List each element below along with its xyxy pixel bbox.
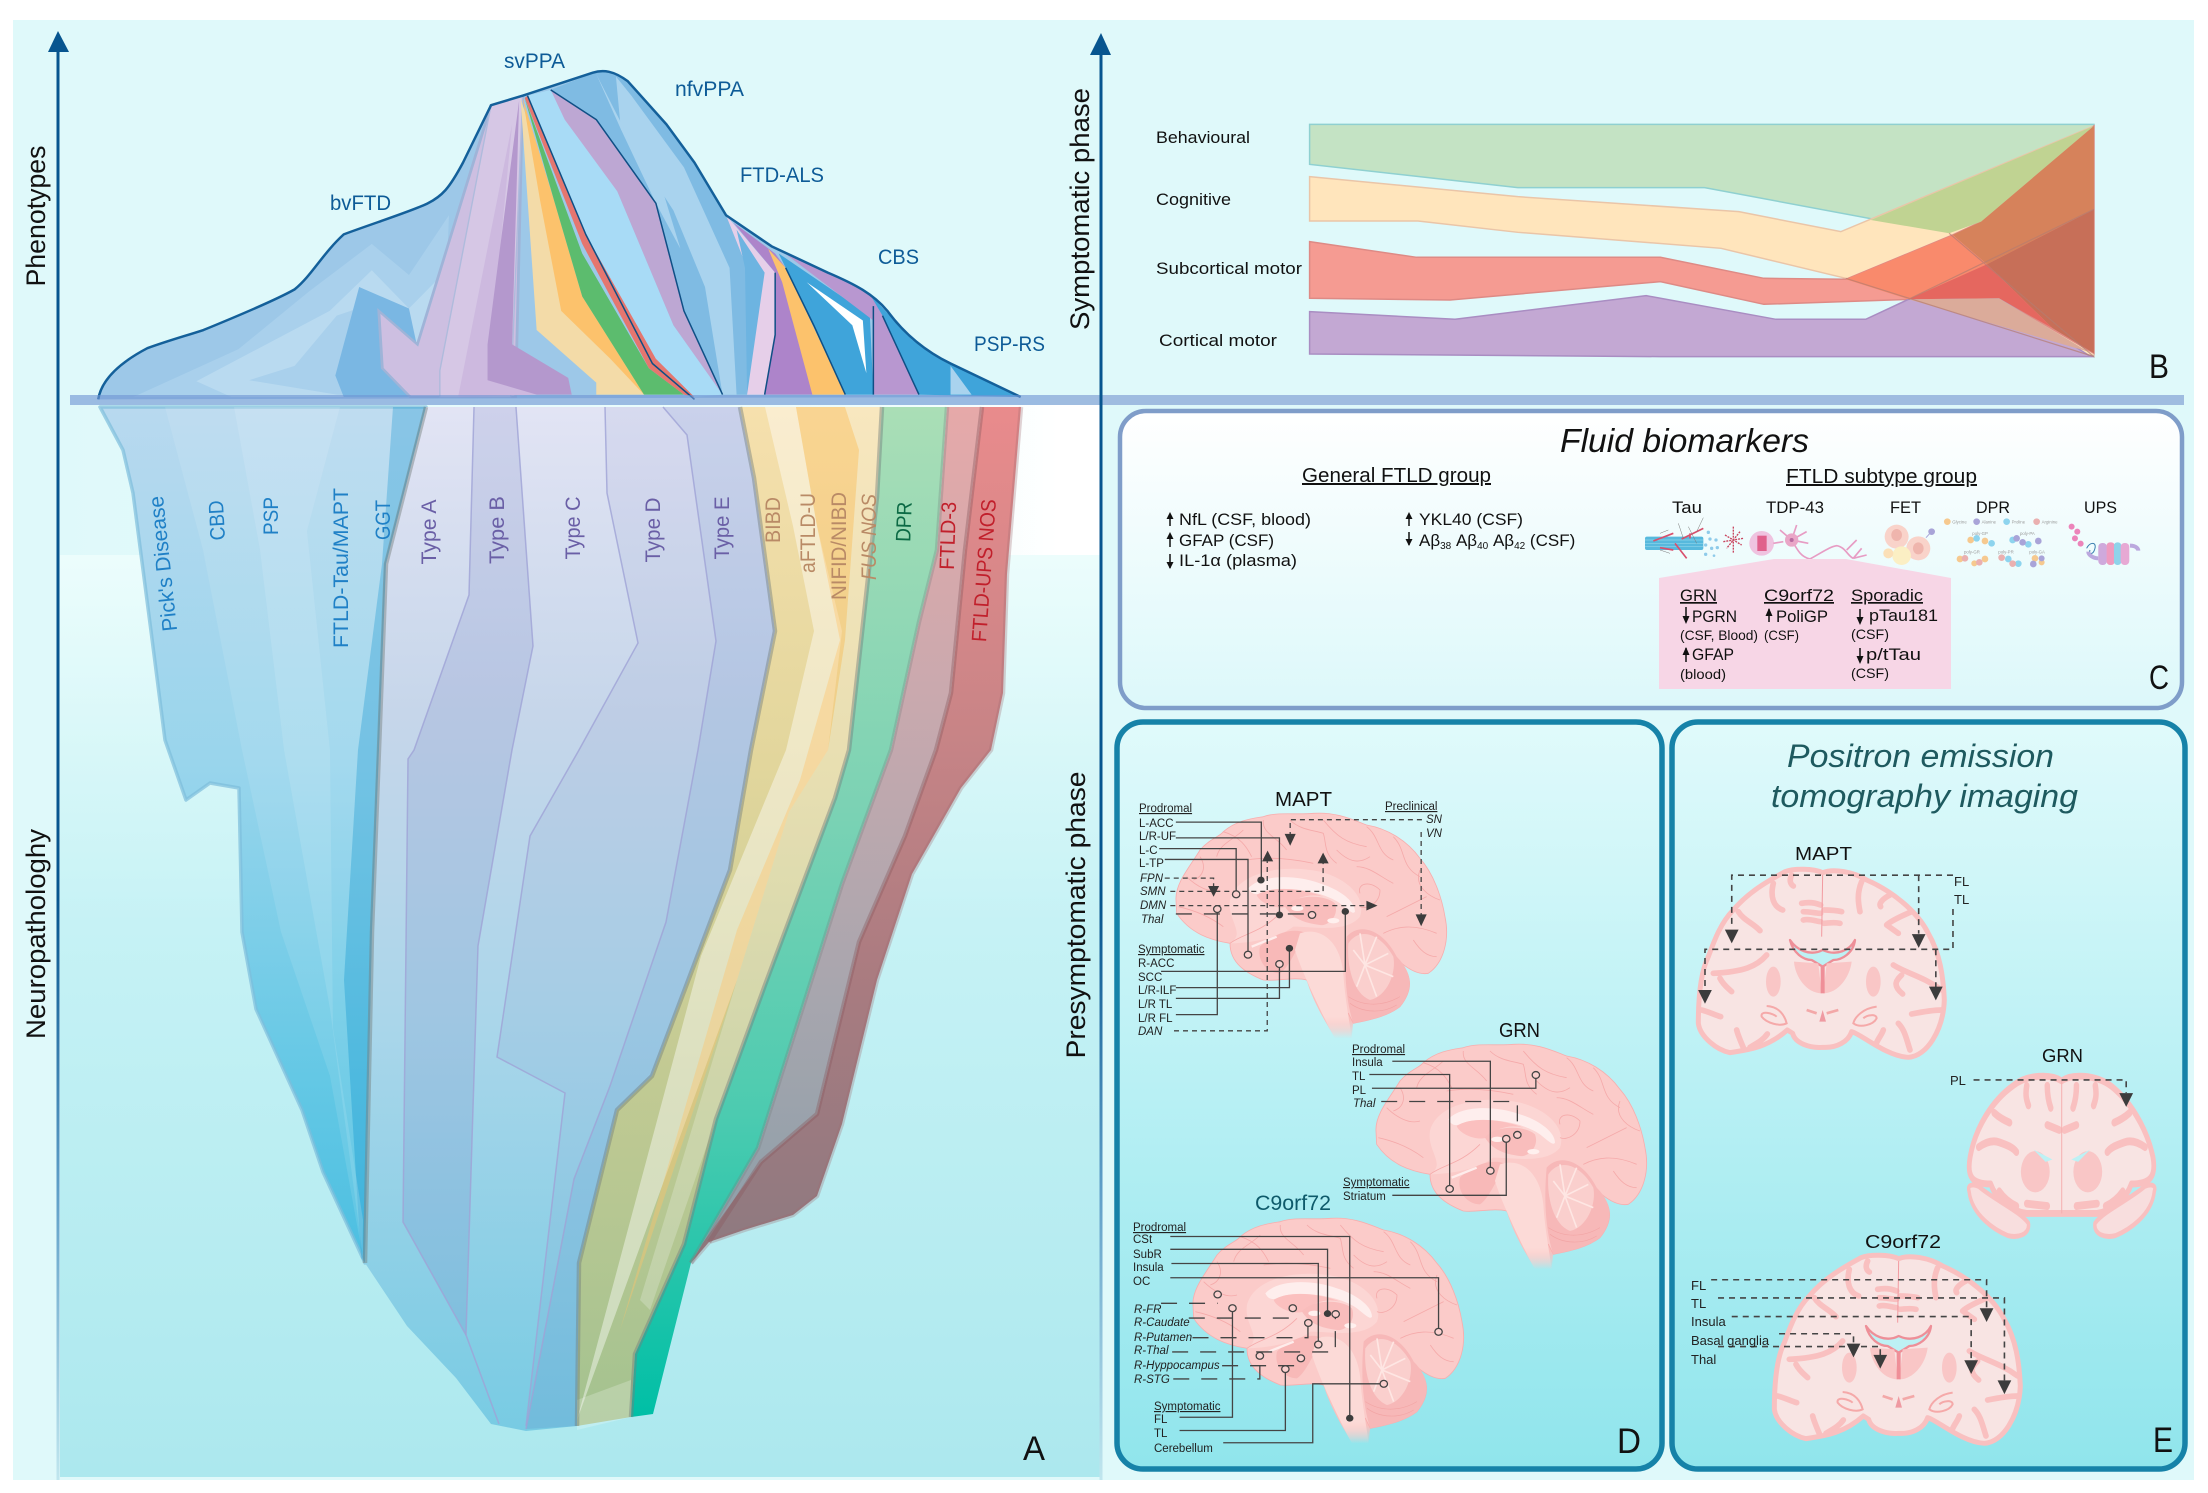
- MAPT region labels: L/R FL: [1138, 1013, 1173, 1025]
- panel letter A: A: [1023, 1430, 1045, 1468]
- neuropathology label: DPR: DPR: [892, 501, 917, 542]
- neuropathology label: FTLD-3: FTLD-3: [936, 501, 961, 570]
- subtype headers: FET: [1890, 498, 1921, 517]
- GRN region labels: Thal: [1353, 1098, 1376, 1110]
- panel letter C: C: [2149, 659, 2169, 697]
- heading: PET imaging title: tomography imaging: [1771, 778, 2078, 814]
- GRN leader lines: [1369, 1061, 1540, 1195]
- C9orf72 region labels: Cerebellum: [1154, 1443, 1213, 1455]
- general biomarker list, right column: Aβ: [1451, 531, 1477, 550]
- GRN region labels: PL: [1352, 1085, 1367, 1097]
- TDP-43 genetic subgroups callout: PoliGP: [1776, 607, 1828, 626]
- icon: DPR dipeptide repeats: poly-GA: [2029, 549, 2045, 554]
- neuropathology label: Type C: Type C: [562, 496, 585, 560]
- icon: MAPT coronal brain: [1698, 869, 1944, 1057]
- general biomarker list, right column: 38: [1440, 541, 1452, 552]
- neuropathology label: GGT: GGT: [372, 500, 395, 540]
- TDP-43 genetic subgroups callout: GFAP: [1692, 645, 1734, 664]
- panel letter D: D: [1617, 1422, 1641, 1461]
- heading: Fluid biomarkers: Fluid biomarkers: [1560, 422, 1809, 459]
- C9orf72 region labels: Prodromal: [1133, 1222, 1186, 1234]
- GRN region labels: Striatum: [1343, 1191, 1386, 1203]
- MAPT region labels: L-ACC: [1139, 818, 1174, 830]
- heading: GRN: GRN: [1499, 1020, 1540, 1042]
- phenotype label: svPPA: svPPA: [504, 50, 565, 73]
- heading: MAPT: MAPT: [1795, 844, 1852, 864]
- MAPT lobes labels: FL: [1954, 874, 1969, 889]
- C9orf72 region labels: Basal ganglia: [1691, 1333, 1770, 1348]
- icon: GRN coronal brain: [1969, 1076, 2155, 1236]
- C9orf72 region labels: FL: [1154, 1414, 1168, 1426]
- TDP-43 genetic subgroups callout: GRN: [1680, 586, 1717, 605]
- heading: MAPT: MAPT: [1275, 789, 1332, 811]
- MAPT region labels: L/R-UF: [1139, 831, 1176, 843]
- GRN region labels: Insula: [1352, 1057, 1383, 1069]
- TDP-43 genetic subgroups callout: [1659, 559, 1951, 689]
- MAPT region labels: Thal: [1141, 914, 1164, 926]
- TDP-43 genetic subgroups callout: p/tTau: [1866, 645, 1921, 664]
- icon: UPS proteasome: [2069, 524, 2138, 565]
- icon: DPR dipeptide repeats: poly-GP: [1972, 531, 1988, 536]
- label: Behavioural: Behavioural: [1156, 128, 1250, 147]
- icon: MAPT sagittal brain: [1176, 813, 1447, 1038]
- icon: DPR dipeptide repeats: Proline: [2012, 519, 2026, 524]
- neuropathology label: FTLD-Tau/MAPT: FTLD-Tau/MAPT: [330, 488, 353, 648]
- panel E: positron emission tomography imaging: [1672, 722, 2185, 1469]
- axis label: Neuropathologhy: Neuropathologhy: [21, 828, 51, 1039]
- subtype headers: UPS: [2084, 498, 2117, 517]
- TDP-43 genetic subgroups callout: C9orf72: [1764, 586, 1834, 605]
- MAPT lobes labels: TL: [1954, 892, 1969, 907]
- MAPT region labels: L-C: [1139, 845, 1158, 857]
- subtype headers: DPR: [1976, 498, 2010, 517]
- neuropathology label: CBD: CBD: [205, 500, 230, 541]
- MAPT region labels: Preclinical: [1385, 801, 1437, 813]
- general biomarker list, left column: NfL (CSF, blood): [1179, 510, 1311, 529]
- general biomarker list, right column: Aβ: [1419, 531, 1440, 550]
- C9orf72 region labels: R-Caudate: [1134, 1317, 1190, 1329]
- MAPT leader lines: [1159, 820, 1427, 1031]
- iceberg body: neuropathology bands: [100, 407, 1021, 1431]
- neuropathology label: FUS NOS: FUS NOS: [858, 494, 881, 580]
- label: Cognitive: Cognitive: [1156, 190, 1231, 209]
- panel A: iceberg of phenotypes and neuropathology: [98, 50, 1045, 1468]
- MAPT region labels: SMN: [1140, 886, 1166, 898]
- TDP-43 genetic subgroups callout: (CSF): [1764, 627, 1799, 643]
- general biomarker list, left column: GFAP (CSF): [1179, 531, 1274, 550]
- C9orf72 region labels: SubR: [1133, 1249, 1162, 1261]
- MAPT region labels: SCC: [1138, 972, 1162, 984]
- label: Subcortical motor: Subcortical motor: [1156, 259, 1302, 278]
- TDP-43 genetic subgroups callout: (CSF): [1851, 626, 1889, 642]
- C9orf72 region labels: OC: [1133, 1276, 1150, 1288]
- general biomarker list, right column: 42: [1514, 541, 1526, 552]
- C9orf72 region labels: Insula: [1691, 1314, 1726, 1329]
- MAPT region labels: L-TP: [1139, 858, 1164, 870]
- C9orf72 region labels: R-Thal: [1134, 1345, 1169, 1357]
- heading: FTLD subtype group: FTLD subtype group: [1786, 466, 1977, 488]
- icon: C9orf72 coronal brain: [1774, 1255, 2020, 1443]
- subtype headers: Tau: [1672, 498, 1702, 517]
- neuropathology label: Type D: Type D: [642, 498, 665, 562]
- C9orf72 region labels: R-STG: [1134, 1374, 1170, 1386]
- neuropathology label: NIFID/NIBD: NIFID/NIBD: [828, 492, 851, 600]
- GRN region labels: [1343, 1044, 1410, 1203]
- C9orf72 region labels: Insula: [1133, 1262, 1164, 1274]
- C9orf72 region labels: CSt: [1133, 1234, 1153, 1246]
- PET arrows: [1698, 875, 2133, 1394]
- C9orf72 region labels: [1133, 1222, 1221, 1455]
- icon: FET aggregates: [1883, 525, 1935, 565]
- MAPT region labels: FPN: [1140, 873, 1164, 885]
- icon: DPR dipeptide repeats: poly-GR: [1964, 549, 1980, 554]
- neuropathology label: Pick's Disease: Pick's Disease: [145, 495, 182, 633]
- icon: C9orf72 sagittal brain: [1193, 1218, 1464, 1443]
- MAPT region labels: [1138, 801, 1443, 1038]
- MAPT region labels: Prodromal: [1139, 803, 1192, 815]
- TDP-43 genetic subgroups callout: (CSF, Blood): [1680, 627, 1758, 643]
- MAPT region labels: L/R TL: [1138, 999, 1173, 1011]
- panel letter E: E: [2153, 1421, 2173, 1460]
- panel D: structural and functional MRI brains: [1117, 722, 1662, 1469]
- neuropathology label: PSP: PSP: [260, 497, 283, 535]
- C9orf72 region labels: TL: [1691, 1296, 1706, 1311]
- TDP-43 genetic subgroups callout: Sporadic: [1851, 586, 1924, 605]
- GRN region labels: Prodromal: [1352, 1044, 1405, 1056]
- C9orf72 leader lines: [1161, 1237, 1442, 1443]
- phenotype label: nfvPPA: nfvPPA: [675, 78, 744, 101]
- right axis arrow: [1090, 33, 1111, 1480]
- general biomarker list, right column: [1406, 510, 1575, 552]
- neuropathology label: Type B: Type B: [486, 496, 509, 564]
- C9orf72 region labels: FL: [1691, 1278, 1706, 1293]
- icon: GRN sagittal brain: [1376, 1044, 1647, 1269]
- C9orf72 region labels: Symptomatic: [1154, 1401, 1221, 1413]
- icon: DPR dipeptide repeats: Arginine: [2042, 519, 2058, 524]
- TDP-43 genetic subgroups callout: (CSF): [1851, 665, 1889, 681]
- label: Cortical motor: Cortical motor: [1159, 331, 1277, 350]
- phenotype label: PSP-RS: PSP-RS: [974, 333, 1045, 356]
- icon: DPR dipeptide repeats: Alanine: [1982, 519, 1997, 524]
- GRN lobe label: PL: [1950, 1073, 1966, 1088]
- TDP-43 genetic subgroups callout: PGRN: [1692, 607, 1737, 626]
- subtype headers: TDP-43: [1766, 498, 1824, 517]
- icon: DPR dipeptide repeats: poly-PA: [2020, 531, 2035, 536]
- MAPT region labels: R-ACC: [1138, 958, 1174, 970]
- panel letter B: B: [2149, 348, 2169, 386]
- general biomarker list, left column: [1166, 510, 1311, 570]
- C9orf72 region labels: R-Putamen: [1134, 1332, 1192, 1344]
- axis label: Presymptomatic phase: Presymptomatic phase: [1061, 772, 1091, 1058]
- heading: C9orf72: C9orf72: [1865, 1232, 1941, 1252]
- C9orf72 region labels: Thal: [1691, 1352, 1716, 1367]
- TDP-43 genetic subgroups callout: (blood): [1680, 666, 1726, 682]
- iceberg tip: clinical phenotypes: [98, 71, 1021, 399]
- general biomarker list, right column: (CSF): [1525, 531, 1575, 550]
- neuropathology label: FTLD-UPS NOS: FTLD-UPS NOS: [968, 498, 1001, 643]
- C9orf72 region labels: R-FR: [1134, 1304, 1161, 1316]
- heading: C9orf72: C9orf72: [1255, 1192, 1331, 1215]
- GRN region labels: Symptomatic: [1343, 1177, 1410, 1189]
- neuropathology label: Type E: Type E: [711, 496, 734, 560]
- heading: PET imaging title: [1771, 738, 2078, 814]
- icon: DPR dipeptide repeats: [1944, 518, 2058, 567]
- MAPT region labels: L/R-ILF: [1138, 985, 1176, 997]
- general biomarker list, right column: Aβ: [1488, 531, 1514, 550]
- C9orf72 region labels: TL: [1154, 1428, 1168, 1440]
- C9orf72 region labels: [1691, 1278, 1770, 1367]
- heading: GRN: GRN: [2042, 1046, 2083, 1066]
- panel C: fluid biomarkers: [1120, 411, 2182, 708]
- neuropathology label: BIBD: BIBD: [762, 497, 785, 543]
- panel B: symptom stream chart: [1156, 124, 2169, 386]
- MAPT lobes labels: [1954, 874, 1969, 907]
- TDP-43 genetic subgroups callout: pTau181: [1869, 606, 1938, 625]
- GRN region labels: TL: [1352, 1071, 1366, 1083]
- stream areas: [1310, 124, 2094, 357]
- phenotype label: bvFTD: bvFTD: [330, 192, 391, 215]
- neuropathology label: aFTLD-U: aFTLD-U: [797, 493, 820, 573]
- MAPT region labels: DMN: [1140, 900, 1167, 912]
- general biomarker list, right column: YKL40 (CSF): [1419, 510, 1523, 529]
- subtype headers: [1672, 498, 2117, 517]
- phenotype label: CBS: CBS: [878, 246, 919, 269]
- general biomarker list, right column: 40: [1477, 541, 1489, 552]
- left axis arrow: [48, 31, 69, 1480]
- icon: DPR dipeptide repeats: Glycine: [1952, 519, 1967, 524]
- waterline bar: [70, 395, 2184, 405]
- axis label: Symptomatic phase: Symptomatic phase: [1065, 88, 1095, 330]
- heading: General FTLD group: General FTLD group: [1302, 465, 1491, 487]
- heading: PET imaging title: Positron emission: [1787, 738, 2054, 774]
- icon: TDP-43 neuron: [1749, 525, 1867, 559]
- icon: DPR dipeptide repeats: poly-PR: [1998, 549, 2014, 554]
- axis label: Phenotypes: Phenotypes: [21, 146, 51, 286]
- general biomarker list, left column: IL-1α (plasma): [1179, 551, 1297, 570]
- C9orf72 region labels: R-Hyppocampus: [1134, 1360, 1220, 1372]
- MAPT region labels: VN: [1426, 828, 1443, 840]
- icon: tau fibril: [1645, 518, 1743, 558]
- MAPT region labels: DAN: [1138, 1026, 1163, 1038]
- MAPT region labels: Symptomatic: [1138, 944, 1205, 956]
- phenotype label: FTD-ALS: FTD-ALS: [740, 164, 824, 187]
- neuropathology label: Type A: Type A: [418, 500, 441, 564]
- MAPT region labels: SN: [1426, 814, 1443, 826]
